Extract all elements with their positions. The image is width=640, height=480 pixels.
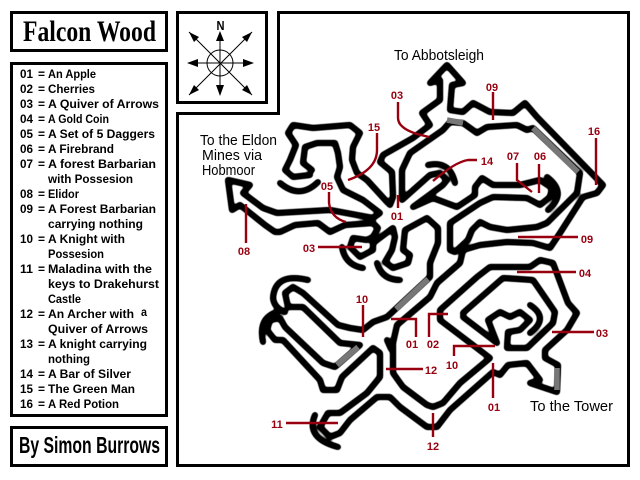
panel: legend: =	[38, 397, 45, 411]
panel: legend: Elidor	[48, 187, 79, 201]
panel: legend: =	[38, 262, 45, 276]
panel: legend: =	[38, 157, 45, 171]
panel: legend: a	[141, 305, 147, 319]
numbered item markers: 10	[446, 360, 458, 372]
grey wall segments	[337, 120, 578, 390]
numbered item markers: 01	[406, 339, 418, 351]
panel: legend: A Set of 5 Daggers	[48, 127, 155, 141]
numbered item markers: 01	[488, 402, 500, 414]
place labels: Hobmoor	[202, 162, 255, 179]
panel: legend: A forest Barbarian	[48, 157, 156, 171]
numbered item markers: 03	[596, 328, 608, 340]
compass letter N: N	[216, 18, 224, 33]
place labels: Mines via	[202, 147, 263, 164]
numbered item markers: 04	[579, 268, 592, 280]
map walls	[228, 65, 603, 447]
numbered item markers: 03	[303, 243, 315, 255]
numbered item markers: 03	[391, 90, 403, 102]
panel: legend: keys to Drakehurst	[48, 277, 159, 291]
numbered item markers: 10	[356, 294, 368, 306]
panel: legend: =	[38, 337, 45, 351]
panel: legend: =	[38, 202, 45, 216]
icon: compass rose	[187, 31, 254, 96]
panel: legend: Maladina with the	[48, 262, 152, 276]
map frame	[178, 12, 628, 466]
numbered item markers: 08	[238, 246, 250, 258]
panel: legend: 11	[20, 262, 33, 276]
panel: author credit	[12, 428, 166, 466]
panel: legend: Possesion	[48, 247, 104, 261]
panel: legend: A Knight with	[48, 232, 125, 246]
panel: legend: 10	[20, 232, 33, 246]
numbered item markers: 12	[425, 365, 437, 377]
panel: compass	[178, 12, 266, 102]
panel: legend: nothing	[48, 352, 90, 366]
panel: legend: =	[38, 112, 45, 126]
numbered item markers: 07	[507, 151, 519, 163]
panel: legend: 15	[20, 382, 33, 396]
numbered item markers: 09	[486, 82, 498, 94]
place labels: To Abbotsleigh	[394, 47, 484, 64]
panel: legend: =	[38, 82, 45, 96]
numbered item markers: 01	[391, 211, 403, 223]
panel: legend: 03	[20, 97, 33, 111]
numbered item markers: 05	[321, 181, 333, 193]
panel: legend: with Possesion	[47, 172, 133, 186]
panel: legend: =	[38, 97, 45, 111]
panel: legend: =	[38, 67, 45, 81]
panel: legend: 06	[20, 142, 33, 156]
numbered item markers: 16	[588, 126, 600, 138]
panel: legend: A Red Potion	[48, 397, 119, 411]
panel: legend: A Quiver of Arrows	[48, 97, 159, 111]
panel: legend: =	[38, 187, 45, 201]
panel: legend: Castle	[48, 292, 81, 306]
panel: legend: A knight carrying	[48, 337, 147, 351]
place labels	[200, 47, 613, 415]
panel: title	[12, 12, 166, 50]
panel: legend: 08	[20, 187, 33, 201]
panel: legend: Cherries	[48, 82, 95, 96]
panel: legend: 02	[20, 82, 33, 96]
panel: legend: 14	[20, 367, 33, 381]
numbered item markers	[238, 82, 608, 453]
panel: legend: 12	[20, 307, 33, 321]
place labels: To the Tower	[530, 398, 613, 415]
cave arcs	[262, 164, 558, 447]
numbered item markers: 02	[427, 339, 439, 351]
numbered item markers: 11	[271, 419, 283, 431]
panel: legend: carrying nothing	[48, 217, 143, 231]
panel: legend: 16	[20, 397, 33, 411]
panel: legend: A Gold Coin	[48, 112, 109, 126]
panel: legend: 07	[20, 157, 33, 171]
panel: legend: Quiver of Arrows	[48, 322, 148, 336]
panel: map	[178, 12, 628, 466]
panel: legend: =	[38, 232, 45, 246]
heading: Falcon Wood: Falcon Wood	[23, 15, 156, 48]
numbered item markers: 15	[368, 122, 380, 134]
numbered item markers: 14	[481, 156, 494, 168]
panel: legend	[12, 64, 166, 416]
panel: legend: A Firebrand	[48, 142, 114, 156]
numbered item markers: 12	[427, 441, 439, 453]
panel: legend: An Apple	[48, 67, 96, 81]
text: By Simon Burrows: By Simon Burrows	[19, 432, 160, 458]
panel: legend: =	[38, 382, 45, 396]
panel: legend: A Forest Barbarian	[48, 202, 156, 216]
panel: legend: 05	[20, 127, 33, 141]
panel: legend: 01	[20, 67, 33, 81]
panel: legend: A Bar of Silver	[48, 367, 131, 381]
panel: legend: 04	[20, 112, 33, 126]
panel: legend: =	[38, 367, 45, 381]
panel: legend: 13	[20, 337, 33, 351]
place labels: To the Eldon	[200, 132, 277, 149]
panel: legend: The Green Man	[48, 382, 135, 396]
panel: legend: =	[38, 307, 45, 321]
numbered item markers: 06	[534, 151, 546, 163]
numbered item markers: 09	[581, 234, 593, 246]
panel: legend: 09	[20, 202, 33, 216]
panel: legend: An Archer with	[48, 307, 134, 321]
panel: legend: =	[38, 142, 45, 156]
panel: legend: =	[38, 127, 45, 141]
